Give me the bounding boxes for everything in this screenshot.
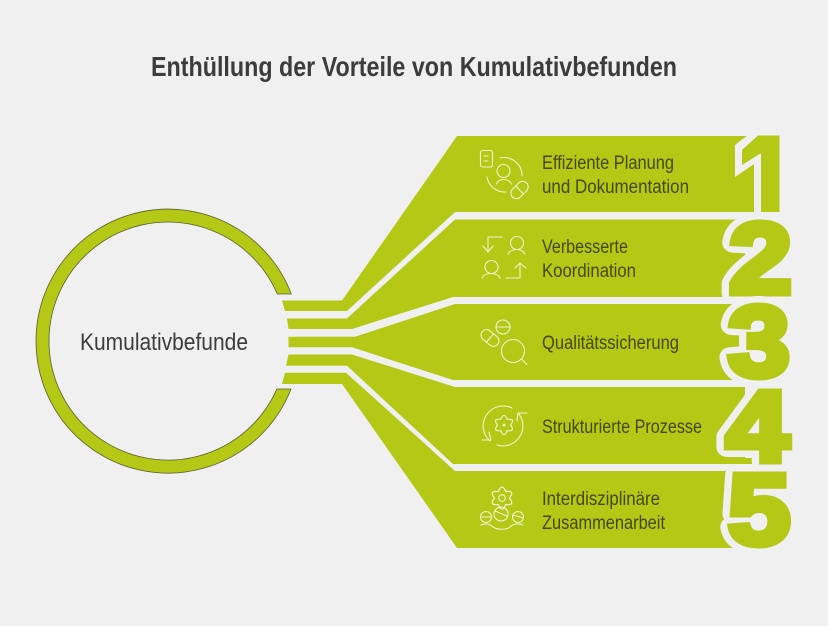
band 4 (286, 354, 758, 464)
icon: pill, tablet, magnifier (479, 320, 527, 364)
central circle ring (36, 209, 291, 473)
label: Qualitätssicherung: Qualitätssicherung (542, 333, 679, 354)
number 1 (735, 136, 780, 212)
label: Interdisziplinäre: Interdisziplinäre (542, 489, 660, 510)
icon: gear over team (480, 487, 524, 529)
label: Effiziente Planung: Effiziente Planung (542, 153, 674, 174)
central label: Kumulativbefunde (80, 329, 248, 356)
label: Verbesserte: Verbesserte (542, 237, 628, 258)
number 3: 3 (728, 286, 790, 398)
band 2 (287, 220, 745, 329)
band 5 (282, 373, 735, 548)
number 4: 4 (726, 370, 789, 483)
label: Koordination: Koordination (542, 261, 636, 282)
band 1 (282, 136, 755, 311)
icon: gear in cycle arrows (482, 406, 527, 446)
number 5: 5 (728, 455, 790, 566)
title: Enthüllung der Vorteile von Kumulativbefunden (151, 51, 677, 82)
label: und Dokumentation: und Dokumentation (542, 177, 689, 198)
label: Strukturierte Prozesse: Strukturierte Prozesse (542, 417, 702, 438)
number 4: 4 (726, 370, 789, 483)
band 3 (288, 304, 745, 380)
number 5: 5 (728, 455, 790, 566)
icon: document, person, pill (480, 150, 530, 201)
label: Zusammenarbeit: Zusammenarbeit (542, 513, 666, 534)
number 2: 2 (729, 202, 792, 315)
number 1: 1 (742, 115, 802, 235)
number 2: 2 (729, 202, 792, 315)
number 3: 3 (728, 286, 790, 398)
icon: coordination arrows and persons (482, 236, 526, 278)
